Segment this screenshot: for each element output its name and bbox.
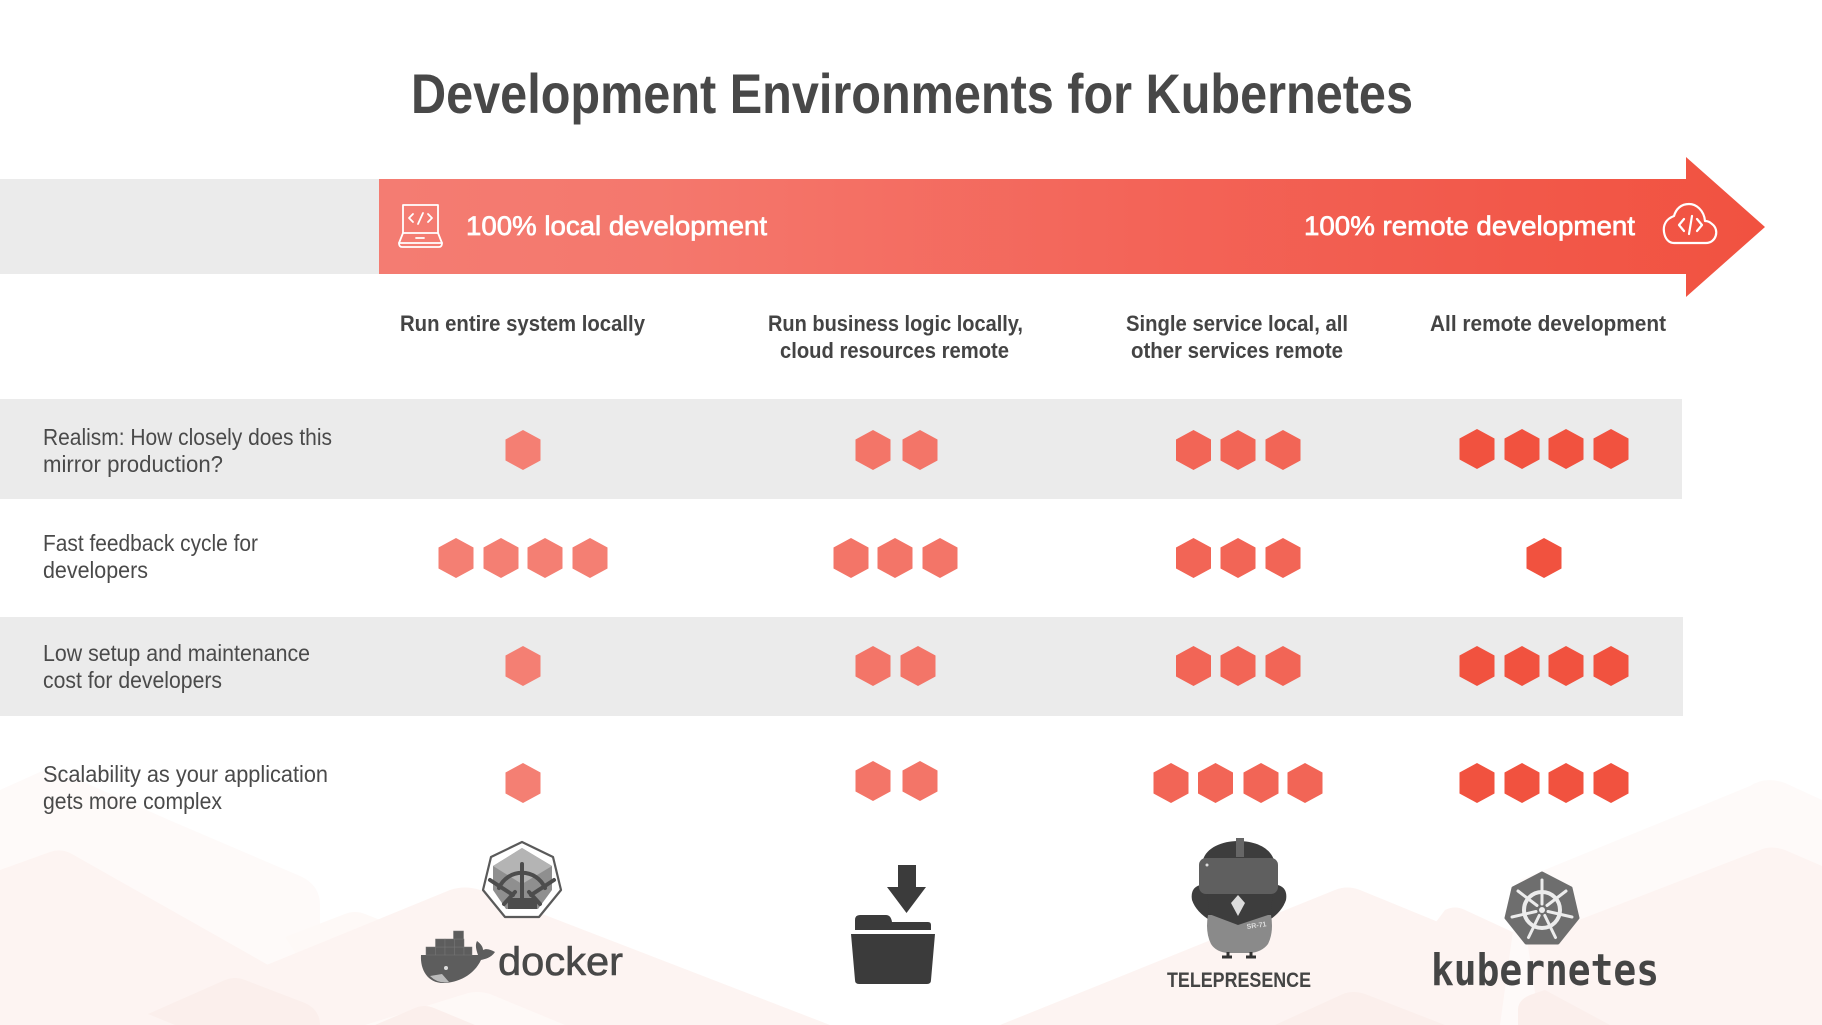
rating: 4 bbox=[1460, 646, 1628, 686]
row label: cost for developers bbox=[43, 667, 222, 693]
rating: 2 bbox=[856, 430, 938, 470]
column headings bbox=[400, 311, 1667, 363]
icon: bird with headset: SR-71 bbox=[1246, 921, 1267, 931]
title: Development Environments for Kubernetes bbox=[411, 62, 1413, 125]
heading: column 3: Single service local, all bbox=[1126, 311, 1348, 336]
rating: 1 bbox=[506, 646, 540, 686]
row: realism bbox=[0, 399, 1682, 499]
row: fast feedback bbox=[43, 530, 1562, 583]
left grey band bbox=[0, 179, 380, 274]
row label: Low setup and maintenance bbox=[43, 640, 310, 666]
rating: 3 bbox=[1176, 646, 1300, 686]
row label: Realism: How closely does this bbox=[43, 424, 332, 450]
icon: folder with download arrow bbox=[851, 865, 935, 984]
row label bbox=[43, 640, 310, 693]
icon: laptop bbox=[399, 205, 442, 247]
rating: 4 bbox=[1460, 763, 1628, 803]
logo: kubernetes bbox=[1431, 873, 1659, 996]
rating: 2 bbox=[856, 646, 936, 686]
heading: column 3 bbox=[1126, 311, 1348, 363]
heading: column 1: Run entire system locally bbox=[400, 311, 646, 336]
rating: 4 bbox=[438, 538, 608, 578]
icon: cloud code bbox=[1664, 204, 1716, 243]
row label: Fast feedback cycle for bbox=[43, 530, 258, 556]
background mountains bbox=[0, 771, 1822, 1025]
docker wordmark: docker bbox=[498, 940, 623, 984]
logo: kind and docker bbox=[421, 842, 623, 984]
heading: column 2 bbox=[768, 311, 1023, 363]
rating: 4 bbox=[1154, 763, 1322, 803]
local label: 100% local development bbox=[466, 211, 767, 241]
row label bbox=[43, 761, 328, 814]
row label bbox=[43, 530, 258, 583]
icon: bird with headset bbox=[1192, 838, 1286, 957]
rating: 3 bbox=[1176, 538, 1300, 578]
gradient arrow bbox=[379, 157, 1765, 297]
kubernetes wordmark: kubernetes bbox=[1431, 945, 1659, 996]
rating: 1 bbox=[1526, 538, 1562, 578]
rating: 2 bbox=[856, 761, 938, 801]
row: scalability bbox=[43, 761, 1628, 814]
rating: 1 bbox=[506, 430, 540, 470]
row label: Scalability as your application bbox=[43, 761, 328, 787]
heading: column 2: cloud resources remote bbox=[780, 338, 1009, 363]
row label bbox=[43, 424, 332, 477]
remote label: 100% remote development bbox=[1304, 211, 1636, 241]
logo: telepresence bbox=[1167, 838, 1311, 992]
heading: column 4: All remote development bbox=[1430, 311, 1667, 336]
rating: 1 bbox=[506, 763, 540, 803]
row label: developers bbox=[43, 557, 148, 583]
icon: kind helm wheel bbox=[483, 842, 561, 917]
icon: kubernetes wheel bbox=[1506, 873, 1578, 943]
telepresence wordmark: TELEPRESENCE bbox=[1167, 969, 1311, 992]
row label: gets more complex bbox=[43, 788, 222, 814]
row label: mirror production? bbox=[43, 451, 223, 477]
icon: docker whale bbox=[421, 931, 495, 983]
rating: 3 bbox=[1176, 430, 1300, 470]
heading: column 3: other services remote bbox=[1131, 338, 1343, 363]
rating: 3 bbox=[834, 538, 958, 578]
heading: column 2: Run business logic locally, bbox=[768, 311, 1023, 336]
rating: 4 bbox=[1460, 429, 1628, 469]
spectrum band bbox=[0, 157, 1765, 297]
row: low setup bbox=[0, 617, 1683, 716]
